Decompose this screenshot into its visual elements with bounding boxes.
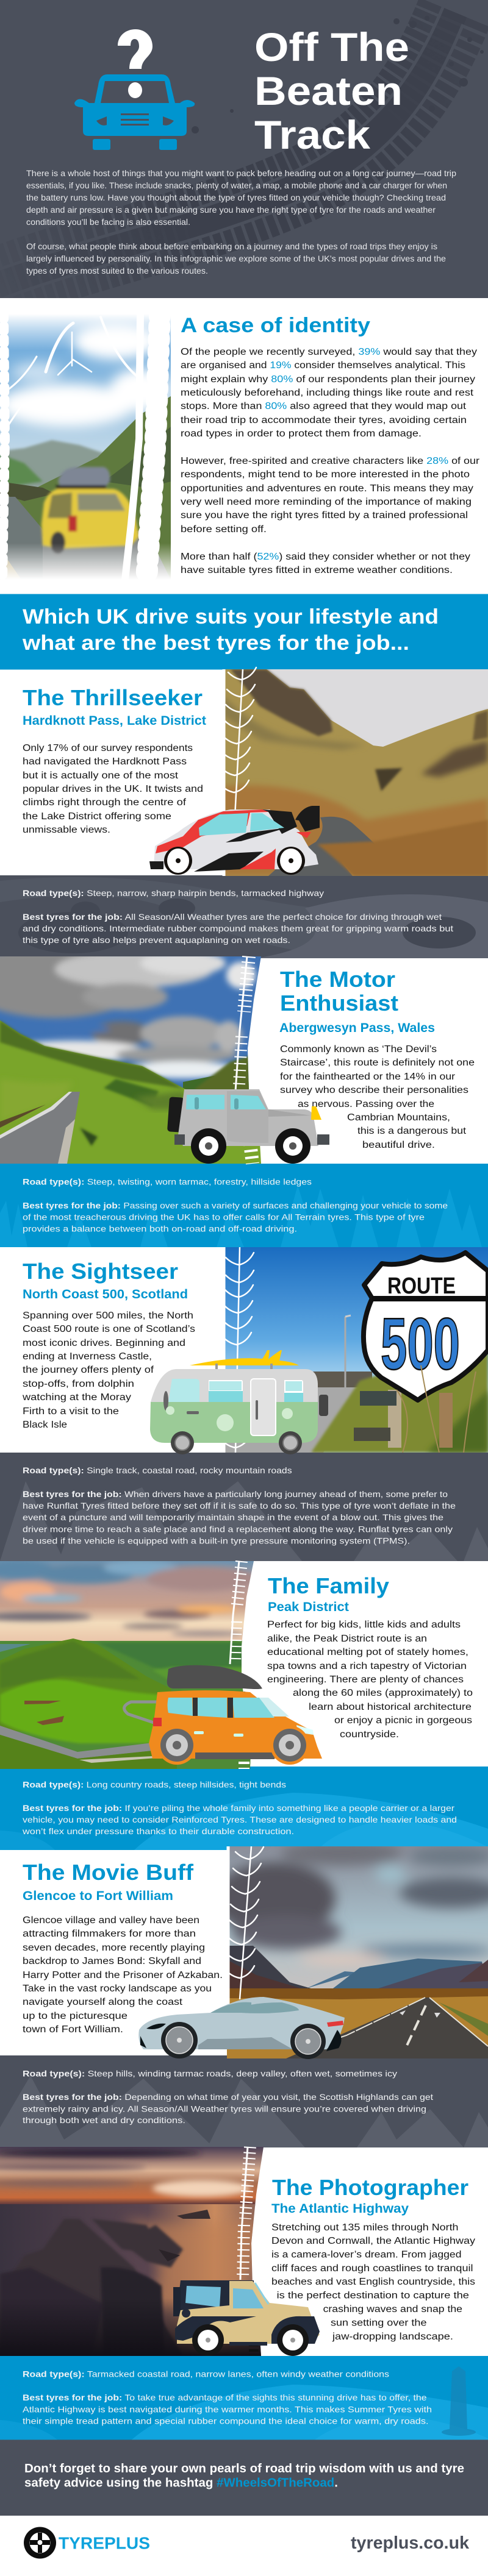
logo: tyreplus: [24, 2527, 150, 2559]
title: Off The: [254, 24, 409, 69]
tyre track: [221, 667, 256, 876]
body copy: alike, the Peak District route is an: [267, 1634, 427, 1644]
body copy: Harry Potter and the Prisoner of Azkaban.: [23, 1970, 223, 1980]
body copy: attracting filmmakers for more than: [23, 1929, 196, 1939]
body copy: climbs right through the centre of: [23, 797, 187, 808]
body copy: [22, 1311, 195, 1430]
body copy: [23, 1915, 223, 2035]
icon: camper van: [150, 1350, 328, 1454]
body copy: the Lake District offering some: [23, 811, 171, 822]
route sign: ROUTE: [387, 1273, 456, 1299]
intro text: [26, 168, 456, 276]
body copy: Firth to a visit to the: [23, 1406, 119, 1417]
body copy: stops. More than 80% also agreed that they would map out: [181, 401, 467, 411]
icon: grey 4x4: [167, 1089, 329, 1164]
body copy: for the fainthearted or the 14% in our: [280, 1072, 455, 1082]
body copy: Take in the vast rocky landscape as you: [23, 1984, 212, 1994]
info panel: [0, 875, 488, 958]
info panel: and dry conditions. Intermediate rubber compound makes them great for gripping warm roads but: [23, 923, 453, 933]
panel: the thrillseeker: [0, 667, 488, 958]
body copy: survey who describe their personalities: [280, 1085, 468, 1095]
icon: tan jeep: [173, 2280, 320, 2356]
body copy: Coast 500 route is one of Scotland’s: [23, 1324, 195, 1334]
logo: tyreplus: TYREPLUS: [59, 2533, 150, 2553]
website: tyreplus.co.uk: [351, 2533, 470, 2553]
panel: call to action: safety advice using the hashtag #WheelsOfTheRoad.: [24, 2476, 338, 2489]
body copy: opportunities and adventures en route. This means they may: [181, 483, 473, 494]
yellow car: [41, 467, 139, 553]
heading: The Sightseer: [23, 1259, 178, 1284]
body copy: countryside.: [340, 1729, 399, 1740]
icon: rally car: [149, 806, 320, 875]
body copy: cliff faces and rough coastlines to tranquil: [271, 2263, 473, 2274]
body copy: up to the picturesque: [23, 2011, 127, 2021]
panel: a case of identity: [0, 314, 479, 580]
body copy: backdrop to James Bond: Skyfall and: [23, 1956, 201, 1966]
tyre track: [230, 1561, 244, 1769]
panel: section heading band: Which UK drive suits your lifestyle and: [23, 605, 439, 628]
intro text: types of tyres most suited to the various routes.: [26, 266, 208, 276]
title: Beaten: [254, 68, 403, 113]
info panel: Best tyres for the job: To take true advantage of the sights this stunning drive has to offer, the: [23, 2393, 427, 2402]
info panel: Best tyres for the job: All Season/All Weather tyres are the perfect choice for driving through wet: [23, 912, 442, 922]
info panel: won’t flex under pressure thanks to their durable construction.: [22, 1826, 294, 1836]
body copy: road types in order to protect them from damage.: [181, 429, 422, 439]
photo: atlantic coast sunset: [0, 2147, 268, 2357]
intro text: Of course, what people think about before embarking on a journey and the types of road trips they enjoy is: [26, 241, 437, 251]
location: North Coast 500, Scotland: [23, 1287, 188, 1301]
tyre track: [235, 956, 253, 1164]
intro text: conditions you’ll be facing is also essential.: [26, 217, 190, 227]
panel: header: [0, 0, 488, 299]
body copy: the journey offers plenty of: [23, 1365, 154, 1375]
photo: peak district: [0, 1560, 256, 1772]
title: [254, 24, 409, 157]
info panel: through both wet and dry conditions.: [23, 2115, 185, 2125]
info panel: provides a balance between both on-road and off-road driving.: [23, 1224, 297, 1234]
info panel: of the most treacherous driving the UK has to offer calls for All Terrain tyres. This type of tyre: [23, 1212, 425, 1222]
panel: call to action: [0, 2439, 488, 2516]
body copy: Stretching out 135 miles through North: [271, 2222, 459, 2233]
body copy: before setting off.: [181, 524, 267, 535]
heading: The Movie Buff: [23, 1860, 194, 1885]
info panel: Road type(s): Steep hills, winding tarmac roads, deep valley, often wet, sometimes icy: [23, 2069, 397, 2079]
photo: yellow car on mountain road: [0, 314, 171, 580]
photo: hardknott pass: [223, 669, 488, 876]
body copy: watching at the Moray: [22, 1392, 131, 1403]
body copy: [280, 1044, 475, 1150]
body copy: beautiful drive.: [362, 1140, 435, 1150]
intro text: the battery runs low. Have you thought about the type of tyres fitted on your vehicle though? Checking tread: [26, 193, 446, 202]
body copy: but it is actually one of the most: [23, 770, 179, 781]
body copy: is the perfect destination to capture the: [277, 2291, 469, 2300]
icon: sports car: [138, 1997, 345, 2059]
tyre track mask: [2, 314, 160, 580]
info panel: Road type(s): Single track, coastal road, rocky mountain roads: [23, 1465, 292, 1475]
body copy: Devon and Cornwall, the Atlantic Highway: [271, 2236, 475, 2246]
body copy: are organised and 19% consider themselves analytical. This: [181, 360, 465, 371]
body copy: along the 60 miles (approximately) to: [293, 1688, 473, 1698]
icon: lighthouse: [442, 2366, 476, 2436]
panel: the photographer: [0, 2147, 488, 2440]
tyre track: [222, 1247, 254, 1453]
body copy: [23, 743, 203, 835]
body copy: Black Isle: [23, 1420, 67, 1430]
heading: A case of identity: [181, 314, 370, 337]
body copy: engineering. There are plenty of chances: [267, 1674, 464, 1685]
photo: route 500 sign: [223, 1247, 488, 1453]
panel: the motor enthusiast: [0, 945, 488, 1247]
body copy: Only 17% of our survey respondents: [23, 743, 193, 753]
body copy: sure you have the right tyres fitted by a trained professional: [181, 510, 468, 521]
tyre track: [240, 2147, 254, 2356]
icon: tyre: [24, 2527, 56, 2559]
body copy: seven decades, more recently playing: [23, 1943, 205, 1953]
info panel: Best tyres for the job: When drivers have a particularly long journey ahead of them, some prefer to: [23, 1489, 448, 1499]
intro text: largely influenced by personality. In this infographic we explore some of the UK’s most popular drives and the: [26, 254, 446, 263]
body copy: Commonly known as ‘The Devil’s: [280, 1044, 437, 1055]
info panel: vehicle, you may need to consider Reinforced Tyres. These are designed to handle heavier loads and: [23, 1815, 457, 1824]
info panel: Best tyres for the job: Passing over such a variety of surfaces and challenging your vehicle to some: [23, 1201, 448, 1211]
body copy: Cambrian Mountains,: [347, 1112, 450, 1123]
heading: [280, 967, 398, 1016]
info panel: be used if the vehicle is equipped with a built-in tyre pressure monitoring system (TPMS).: [23, 1536, 410, 1546]
info panel: Road type(s): Tarmacked coastal road, narrow lanes, often windy weather conditions: [23, 2369, 389, 2379]
info panel: Road type(s): Steep, narrow, sharp hairpin bends, tarmacked highway: [23, 888, 324, 898]
body copy: town of Fort William.: [23, 2024, 123, 2035]
info panel: their simple tread pattern and special rubber compound the ideal choice for warm, dry roads.: [23, 2416, 428, 2426]
body copy: as nervous. Passing over the: [298, 1099, 434, 1109]
tyre track background: [0, 0, 484, 299]
body copy: spa towns and a rich tapestry of Victorian: [267, 1661, 467, 1671]
info panel: [0, 1767, 488, 1850]
body copy: jaw-dropping landscape.: [332, 2332, 453, 2342]
body copy: crashing waves and snap the: [323, 2304, 462, 2314]
panel: section heading band: [0, 594, 488, 669]
info panel: Best tyres for the job: Depending on what time of year you visit, the Scottish Highlands can get: [23, 2092, 433, 2102]
intro text: There is a whole host of things that you might want to pack before heading out on a long car journey—road trip: [26, 168, 456, 178]
info panel: Atlantic Highway is best navigated during the warmer months. This makes Summer Tyres with: [23, 2404, 432, 2414]
body copy: [271, 2222, 475, 2342]
panel: the sightseer: [0, 1247, 488, 1561]
body copy: sun setting over the: [331, 2318, 427, 2329]
body copy: [267, 1620, 473, 1740]
location: Abergwesyn Pass, Wales: [279, 1021, 435, 1035]
location: Hardknott Pass, Lake District: [23, 714, 206, 728]
intro text: essentials, if you like. These include snacks, plenty of water, a map, a mobile phone and a car charger for when: [26, 180, 447, 190]
info panel: extremely rainy and icy. All Season/All Weather tyres will ensure you’re covered when driving: [23, 2104, 426, 2114]
info panel: [0, 2356, 488, 2440]
body copy: is a camera-lover’s dream. From jagged: [271, 2249, 461, 2260]
body copy: More than half ( 52% ) said they consider whether or not they: [181, 552, 470, 562]
photo: glencoe road: [214, 1841, 488, 2058]
info panel: Road type(s): Long country roads, steep hillsides, tight bends: [23, 1780, 286, 1790]
info panel: this type of tyre also helps prevent aquaplaning on wet roads.: [23, 935, 290, 945]
info panel: driver more time to reach a safe place and find a replacement along the way. Runflat tyres can only: [23, 1524, 453, 1534]
intro text: depth and air pressure is a given but making sure you have the right type of tyre for the roads and weather: [26, 205, 436, 215]
tyre track: [226, 1846, 264, 2005]
info panel: [0, 1453, 488, 1561]
body copy: meticulously beforehand, including things like route and rest: [181, 388, 474, 398]
icon: orange family car: [149, 1665, 322, 1765]
body copy: respondents, might tend to be more interested in the photo: [181, 469, 470, 480]
body copy: or enjoy a picnic in gorgeous: [334, 1715, 472, 1726]
body copy: Glencoe village and valley have been: [23, 1915, 199, 1926]
body copy: However, free-spirited and creative characters like 28% of our: [181, 456, 479, 466]
body copy: Of the people we recently surveyed, 39% would say that they: [181, 347, 477, 357]
heading: The Family: [268, 1573, 389, 1598]
body copy: their road trip to accommodate their tyres, avoiding certain: [181, 415, 467, 425]
body copy: Spanning over 500 miles, the North: [23, 1311, 193, 1321]
info panel: Road type(s): Steep, twisting, worn tarmac, forestry, hillside ledges: [23, 1176, 312, 1186]
location: Peak District: [268, 1600, 349, 1614]
heading: The Thrillseeker: [23, 685, 203, 710]
photo: abergwesyn pass: [0, 945, 262, 1164]
info panel: [0, 2055, 488, 2147]
body copy: navigate yourself along the coast: [23, 1997, 183, 2007]
info panel: have Runflat Tyres fitted before they set off if it is safe to do so. This type of tyre won’t deflate in the: [23, 1501, 456, 1510]
body copy: Perfect for big kids, little kids and adults: [267, 1620, 461, 1630]
route sign: [364, 1253, 488, 1400]
body copy: most iconic drives. Beginning and: [23, 1338, 185, 1348]
body copy: stop-offs, from dolphin: [23, 1379, 134, 1389]
body copy: this is a dangerous but: [357, 1126, 467, 1136]
panel: the family: [0, 1560, 488, 1850]
location: The Atlantic Highway: [271, 2202, 409, 2216]
body copy: educational melting pot of stately homes,: [267, 1647, 468, 1657]
heading: Enthusiast: [280, 991, 398, 1016]
heading: The Photographer: [272, 2175, 468, 2200]
panel: section heading band: what are the best tyres for the job...: [22, 632, 409, 655]
body copy: popular drives in the UK. It twists and: [23, 784, 203, 794]
body copy: beaches and vast English countryside, this: [271, 2277, 475, 2287]
panel: the movie buff: [0, 1841, 488, 2147]
info panel: Best tyres for the job: If you’re piling the whole family into something like a people carrier or a larger: [23, 1803, 454, 1813]
body copy: have suitable tyres fitted in extreme weather conditions.: [181, 565, 453, 575]
title: Track: [254, 112, 370, 157]
icon: car with question mark: [74, 29, 195, 150]
body copy: very well need more reminding of the importance of making: [181, 497, 472, 507]
body copy: unmissable views.: [23, 825, 110, 835]
body copy: ending at Inverness Castle,: [23, 1351, 152, 1362]
info panel: [0, 1164, 488, 1247]
info panel: event of a puncture and will temporarily maintain shape in the event of a blow out. This gives the: [23, 1512, 443, 1522]
body copy: Staircase’, this route is definitely not one: [280, 1058, 475, 1068]
panel: call to action: Don’t forget to share your own pearls of road trip wisdom with us and tyre: [24, 2462, 464, 2475]
body copy: had navigated the Hardknott Pass: [23, 756, 187, 767]
heading: The Motor: [280, 967, 395, 992]
location: Glencoe to Fort William: [23, 1889, 173, 1903]
body copy: might explain why 80% of our respondents plan their journey: [181, 374, 475, 385]
body copy: [181, 347, 479, 575]
body copy: learn about historical architecture: [309, 1702, 472, 1712]
